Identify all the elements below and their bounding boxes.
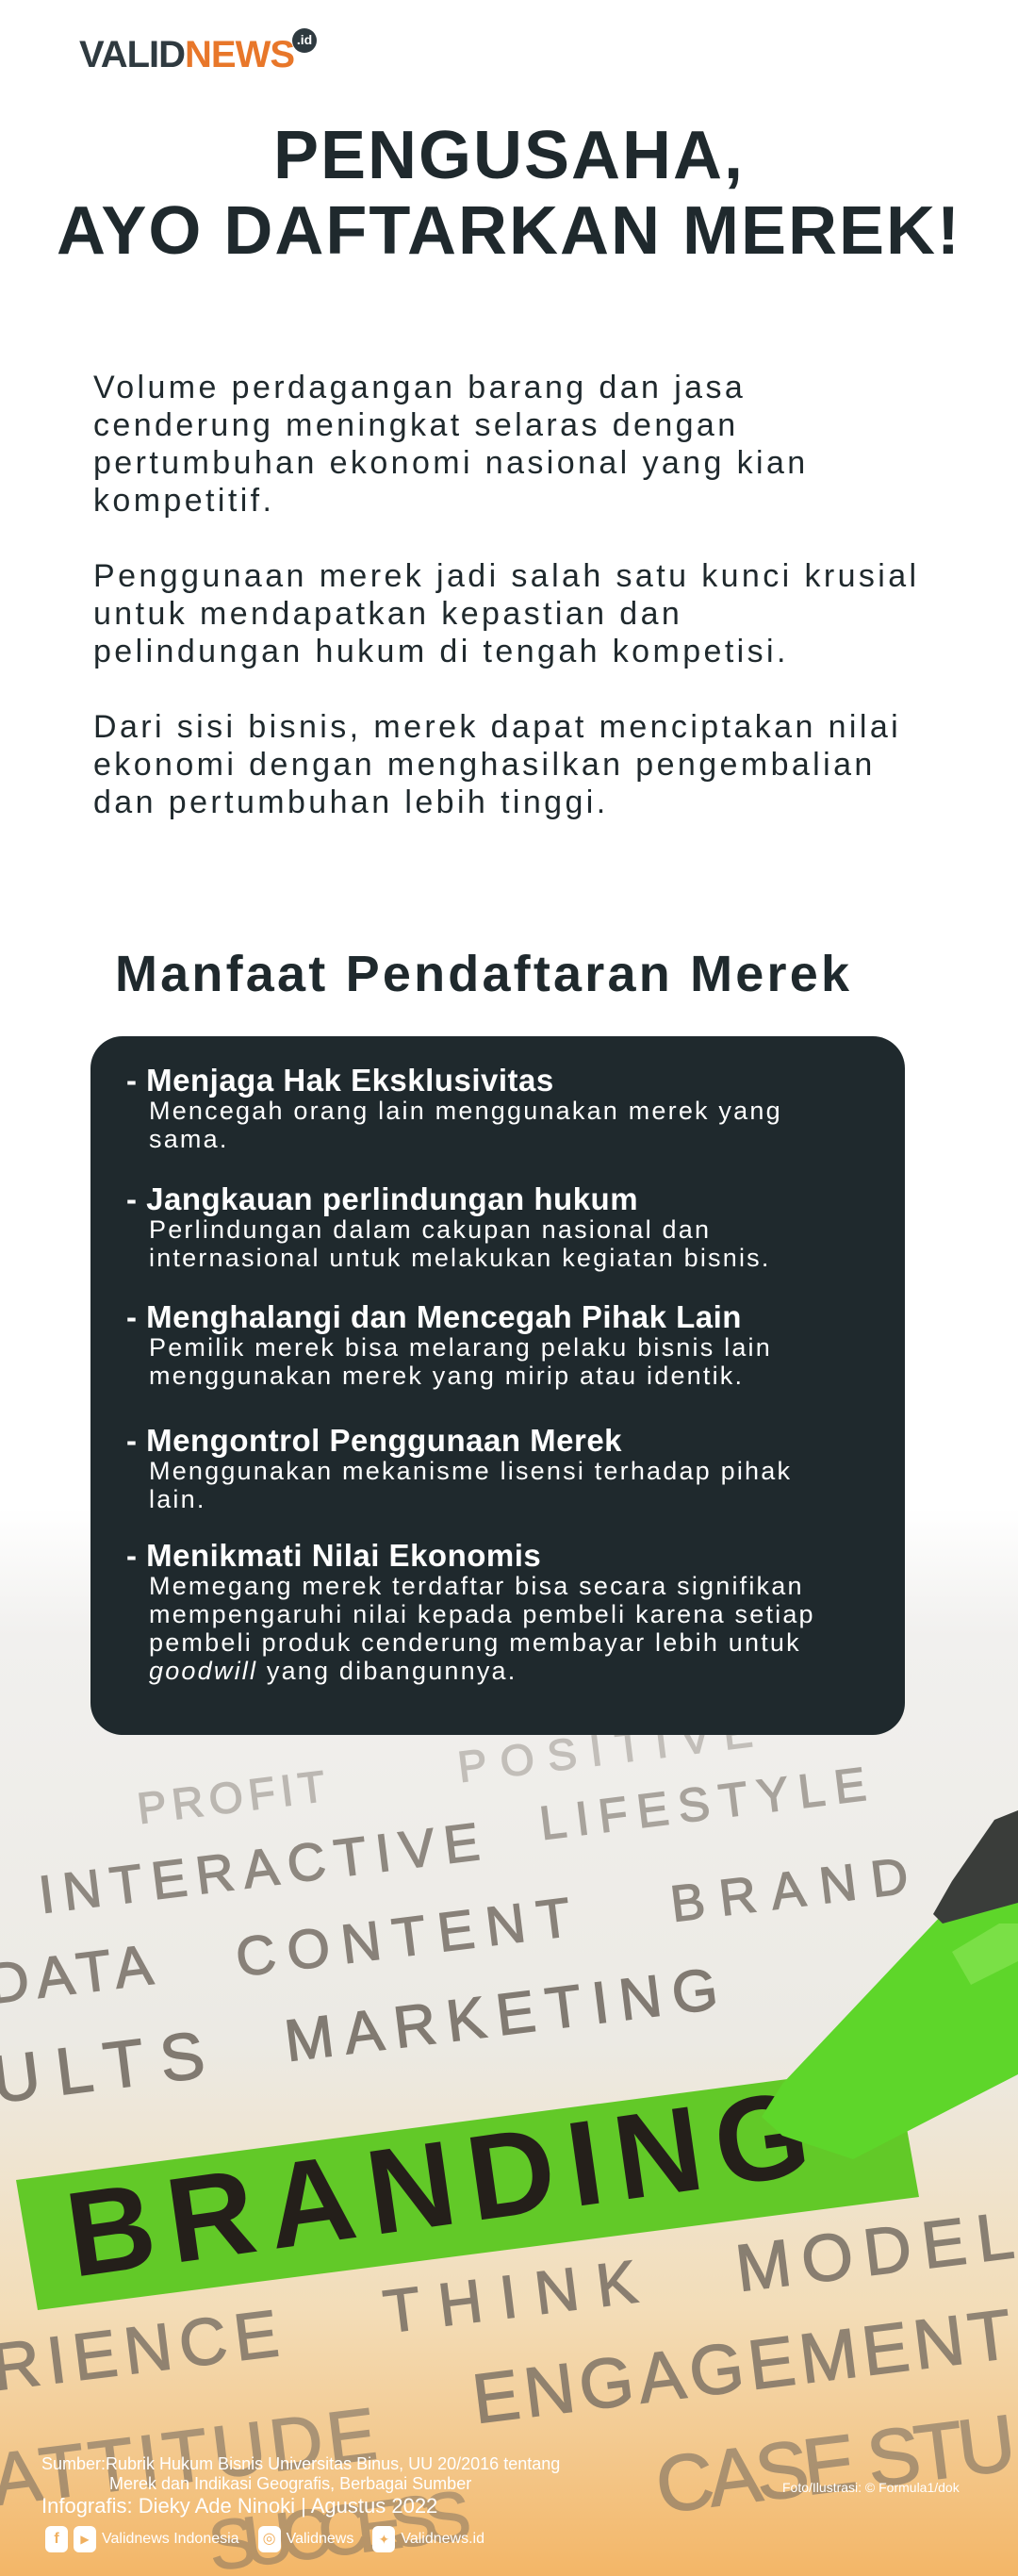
item 2: Perlindungan dalam cakupan nasional dan	[149, 1215, 711, 1244]
photo background: CASE STU	[651, 2398, 1018, 2530]
item 3: - Menghalangi dan Mencegah Pihak Lain	[126, 1299, 742, 1334]
body text: cenderung meningkat selaras dengan	[93, 407, 739, 443]
footer: social icons	[45, 2526, 484, 2552]
footer: social icons: ◎	[263, 2531, 276, 2547]
body text: Penggunaan merek jadi salah satu kunci krusial	[93, 558, 920, 594]
body text: kompetitif.	[93, 483, 274, 519]
footer: social icons: Validnews.id	[401, 2531, 484, 2547]
photo credit: Foto/Ilustrasi: © Formula1/dok	[782, 2480, 960, 2495]
body text: Volume perdagangan barang dan jasa	[93, 370, 746, 405]
title: AYO DAFTARKAN MEREK!	[57, 193, 961, 269]
photo background: MODEL	[731, 2198, 1018, 2305]
photo background: POSITIVE	[455, 1707, 755, 1792]
item 3	[126, 1299, 772, 1390]
footer: source	[41, 2454, 560, 2493]
body text: ekonomi dengan menghasilkan pengembalian	[93, 747, 876, 783]
footer: social icons: ✦	[378, 2532, 389, 2547]
title	[57, 118, 961, 269]
panel: benefits	[90, 1036, 905, 1735]
photo background	[0, 1570, 1018, 2576]
body text: untuk mendapatkan kepastian dan	[93, 596, 682, 632]
body text	[93, 370, 920, 820]
item 1: - Menjaga Hak Eksklusivitas	[126, 1063, 554, 1098]
item 1	[126, 1063, 782, 1153]
photo background: ENGAGEMENT	[468, 2294, 1016, 2438]
photo background: INTERACTIVE	[36, 1811, 483, 1924]
footer: social icons: ▶	[80, 2533, 90, 2546]
footer: credit: Infografis: Dieky Ade Ninoki | Agustus 2022	[41, 2494, 437, 2518]
item 5: goodwill yang dibangunnya.	[149, 1657, 517, 1685]
item 1: Mencegah orang lain menggunakan merek yang	[149, 1097, 782, 1125]
marker	[762, 1810, 1018, 2159]
item 2	[126, 1181, 771, 1272]
footer: social icons: Validnews	[287, 2531, 353, 2547]
logo: VALIDNEWS	[79, 34, 294, 75]
photo background: CONTENT	[233, 1887, 574, 1989]
item 5: mempengaruhi nilai kepada pembeli karena setiap	[149, 1600, 815, 1628]
body text: pelindungan hukum di tengah kompetisi.	[93, 634, 789, 669]
body text: Dari sisi bisnis, merek dapat menciptakan nilai	[93, 709, 901, 745]
item 3: menggunakan merek yang mirip atau identik.	[149, 1362, 744, 1390]
body text: pertumbuhan ekonomi nasional yang kian	[93, 445, 809, 481]
body text: dan pertumbuhan lebih tinggi.	[93, 784, 609, 820]
item 4: Menggunakan mekanisme lisensi terhadap pihak	[149, 1457, 792, 1485]
item 2: - Jangkauan perlindungan hukum	[126, 1181, 638, 1216]
photo background: THINK	[380, 2248, 641, 2346]
item 4: - Mengontrol Penggunaan Merek	[126, 1423, 622, 1458]
item 5: Memegang merek terdaftar bisa secara signifikan	[149, 1572, 804, 1600]
photo background: PROFIT	[135, 1761, 328, 1833]
item 5	[126, 1538, 815, 1685]
logo: .id	[297, 32, 312, 47]
item 3: Pemilik merek bisa melarang pelaku bisnis lain	[149, 1333, 772, 1362]
item 4: lain.	[149, 1485, 206, 1513]
item 2: internasional untuk melakukan kegiatan bisnis.	[149, 1244, 771, 1272]
BRANDING highlight: BRANDING	[58, 2066, 817, 2304]
title: PENGUSAHA,	[273, 118, 745, 193]
footer: social icons: f	[54, 2531, 59, 2547]
footer: source: Sumber:Rubrik Hukum Bisnis Universitas Binus, UU 20/2016 tentang	[41, 2454, 560, 2473]
item 5: pembeli produk cenderung membayar lebih untuk	[149, 1628, 801, 1657]
photo background: MARKETING	[281, 1957, 721, 2074]
heading: manfaat: Manfaat Pendaftaran Merek	[115, 946, 852, 1002]
item 1: sama.	[149, 1125, 229, 1153]
item 4	[126, 1423, 792, 1513]
photo background: BRAND	[667, 1848, 911, 1933]
item 5: - Menikmati Nilai Ekonomis	[126, 1538, 541, 1573]
photo background: LIFESTYLE	[537, 1758, 869, 1850]
footer: source: Merek dan Indikasi Geografis, Berbagai Sumber	[109, 2474, 471, 2493]
footer: social icons: Validnews Indonesia	[102, 2531, 239, 2547]
